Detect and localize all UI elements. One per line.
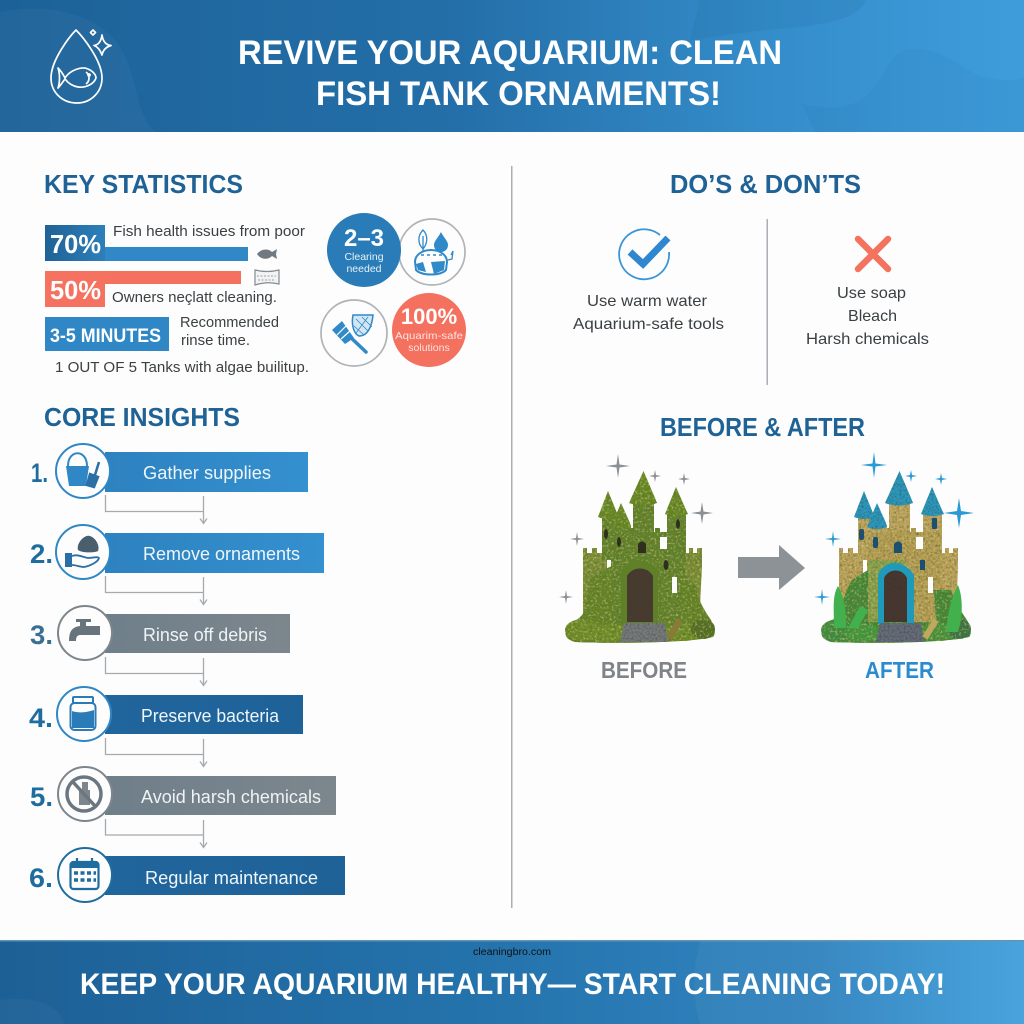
don'ts list: Use soap <box>837 285 906 302</box>
sparkles: before <box>559 454 713 604</box>
stat: algae buildup: 1 OUT OF 5 Tanks with algae builitup. <box>55 360 309 376</box>
illustration: mossy castle before <box>565 471 715 643</box>
badge: ornament icon <box>399 219 465 285</box>
badge: 2-3 cleaning needed: needed <box>346 263 382 275</box>
badge: 2-3 cleaning needed: Clearing <box>344 251 384 263</box>
sparkles: after <box>814 452 974 605</box>
do's list <box>573 293 724 333</box>
footer banner <box>0 940 1024 1024</box>
don'ts list: Harsh chemicals <box>806 331 929 348</box>
do's list: Use warm water <box>587 293 708 310</box>
badge: 100 percent aquarium-safe solutions: 100% <box>401 304 457 329</box>
badge: 100 percent aquarium-safe solutions <box>392 293 466 367</box>
arrow: step 5 to 6 <box>106 819 207 848</box>
step 6: regular maintenance: 6. <box>29 863 53 893</box>
title <box>238 34 782 113</box>
arrow: before to after <box>738 545 805 590</box>
icon: check mark <box>619 229 669 279</box>
step 2: remove ornaments: Remove ornaments <box>143 544 300 564</box>
step 3: rinse off debris: Rinse off debris <box>143 625 267 645</box>
source credit: cleaningbro.com <box>473 947 551 958</box>
do's list: Aquarium-safe tools <box>573 316 724 333</box>
stat: 50 percent: Owners neçlatt cleaning. <box>112 290 277 306</box>
panel: key statistics <box>44 171 466 376</box>
icon: water drop with fish <box>51 30 111 103</box>
panel: do's and don'ts <box>573 171 929 385</box>
step 5: avoid harsh chemicals <box>30 767 336 821</box>
stat: 50 percent <box>45 270 279 307</box>
badge: brush and net tools <box>321 300 387 366</box>
arrow: step 1 to 2 <box>106 495 207 524</box>
don'ts list <box>806 285 929 348</box>
badge: 100 percent aquarium-safe solutions: Aquarim-safe <box>395 330 463 342</box>
badge: 100 percent aquarium-safe solutions: solutions <box>408 342 450 354</box>
stat: 70 percent: 70% <box>50 229 101 259</box>
illustration: clean castle after <box>821 471 971 643</box>
arrow: step 4 to 5 <box>106 738 207 766</box>
step 1: gather supplies <box>31 444 308 498</box>
vertical divider <box>511 166 512 908</box>
badge: 2-3 cleaning needed <box>327 213 401 287</box>
stat: rinse time <box>45 315 279 351</box>
step 6: regular maintenance: Regular maintenance <box>145 868 318 888</box>
step 4: preserve bacteria <box>29 687 303 741</box>
step 2: remove ornaments <box>30 525 324 579</box>
step 1: gather supplies: Gather supplies <box>143 463 271 483</box>
step 1: gather supplies: 1. <box>31 458 48 488</box>
step 3: rinse off debris: 3. <box>30 620 53 650</box>
header banner <box>0 0 1024 132</box>
badge: 2-3 cleaning needed: 2–3 <box>344 225 384 252</box>
arrow: step 3 to 4 <box>106 657 207 686</box>
panel: before and after <box>559 414 974 683</box>
step 2: remove ornaments: 2. <box>30 539 53 569</box>
panel: core insights <box>29 404 345 902</box>
arrow: step 2 to 3 <box>106 576 207 604</box>
step 5: avoid harsh chemicals: Avoid harsh chemicals <box>141 787 321 807</box>
heading: core insights: CORE INSIGHTS <box>44 404 240 432</box>
step 4: preserve bacteria: 4. <box>29 703 53 733</box>
icon: cross mark <box>858 239 888 269</box>
title: FISH TANK ORNAMENTS! <box>316 75 721 113</box>
step 4: preserve bacteria: Preserve bacteria <box>141 706 280 726</box>
label: before: BEFORE <box>601 657 687 683</box>
don'ts list: Bleach <box>848 308 897 325</box>
stat: rinse time: 3-5 MINUTES <box>50 326 161 347</box>
stat: rinse time: Recommended <box>180 315 279 331</box>
heading: key statistics: KEY STATISTICS <box>44 171 243 199</box>
stat: rinse time: rinse time. <box>181 333 250 349</box>
heading: do's and don'ts: DO’S & DON’TS <box>670 171 861 199</box>
label: after: AFTER <box>865 657 934 683</box>
stat: 50 percent: 50% <box>50 275 101 305</box>
footer call to action: KEEP YOUR AQUARIUM HEALTHY— START CLEANING TODAY! <box>80 968 945 1001</box>
heading: before and after: BEFORE & AFTER <box>660 414 865 442</box>
step 5: avoid harsh chemicals: 5. <box>30 782 53 812</box>
stat: 70 percent: Fish health issues from poor <box>113 224 305 240</box>
stat: 70 percent <box>45 224 305 261</box>
divider between do's and don'ts <box>766 219 768 385</box>
title: REVIVE YOUR AQUARIUM: CLEAN <box>238 34 782 72</box>
step 3: rinse off debris <box>30 606 290 660</box>
step 6: regular maintenance <box>29 848 345 902</box>
